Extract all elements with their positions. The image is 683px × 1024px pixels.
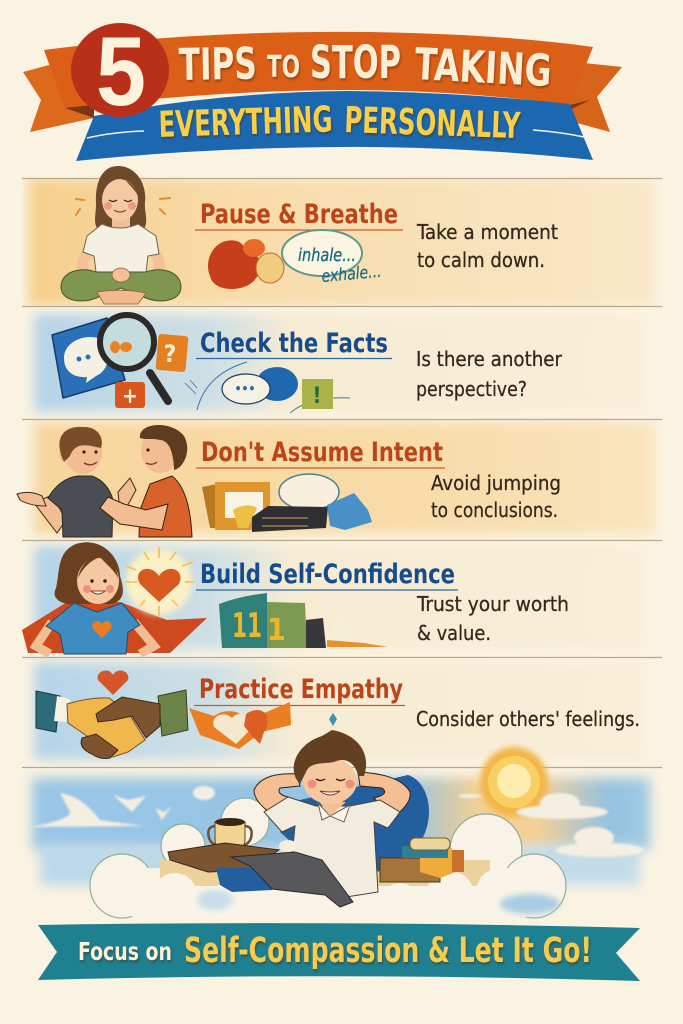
icon: blue bag <box>216 868 272 892</box>
body text: perspective? <box>416 377 527 401</box>
title text: TAKING <box>413 39 553 97</box>
panel: pause and breathe <box>22 166 662 306</box>
right ribbon tail <box>555 62 622 132</box>
panel wash <box>34 546 644 650</box>
icon: glowing heart <box>125 547 194 616</box>
panel: build self-confidence <box>22 542 662 658</box>
sun <box>480 747 548 817</box>
blue subtitle band <box>76 91 593 161</box>
panel wash <box>34 662 644 760</box>
banner text <box>78 931 592 971</box>
arms behind head <box>254 774 300 814</box>
head <box>303 758 357 804</box>
heading: Practice Empathy <box>199 674 403 705</box>
icon: two people talking <box>17 425 192 537</box>
legs <box>61 270 181 301</box>
icon: speech bubbles: ! <box>312 384 322 409</box>
left cuff <box>36 691 60 732</box>
icon: breath clouds: inhale... <box>298 245 356 266</box>
icon: folders and boxes <box>202 474 372 532</box>
ribbon folds <box>65 100 94 118</box>
feet <box>97 290 146 304</box>
body text <box>416 592 569 645</box>
body text: to calm down. <box>417 248 545 272</box>
plus tile: + <box>122 384 138 408</box>
number badge: 5 <box>96 16 146 126</box>
body text: & value. <box>417 621 491 645</box>
body text: to conclusions. <box>431 498 558 522</box>
body text: Take a moment <box>416 220 558 244</box>
icon: book on table <box>168 843 279 872</box>
icon: speech bubbles <box>185 362 350 413</box>
icon: handshake <box>36 671 188 758</box>
hair <box>55 542 123 604</box>
panel wash <box>28 178 654 306</box>
icon: small diamond <box>329 713 337 726</box>
bottom banner <box>38 923 640 981</box>
subtitle text: PERSONALLY <box>344 100 521 147</box>
collar <box>318 803 350 822</box>
body text: Is there another <box>416 347 563 371</box>
right cuff <box>158 690 188 736</box>
neck <box>318 800 346 816</box>
sky wash <box>32 778 650 850</box>
arms <box>82 252 160 277</box>
icon: blocks and hill: 1 <box>267 613 286 648</box>
person two <box>100 425 192 537</box>
banner text: Focus on <box>78 937 172 966</box>
t-shirt <box>83 224 159 272</box>
panel wash <box>34 422 654 534</box>
icon: meditating person <box>61 166 181 304</box>
shirt <box>264 797 400 898</box>
heading: Build Self-Confidence <box>200 559 455 590</box>
body text <box>416 220 558 272</box>
panel wash <box>34 314 644 412</box>
hair back <box>95 166 146 232</box>
title text: STOP <box>310 36 401 89</box>
heading: Pause & Breathe <box>200 199 398 230</box>
neck <box>112 214 130 228</box>
sky clouds <box>30 786 644 857</box>
icon: hearts and bird <box>189 702 291 749</box>
heading: Check the Facts <box>200 328 388 359</box>
face <box>77 558 119 604</box>
chat bubble <box>64 337 108 383</box>
icon: magnifier over chat <box>52 315 189 408</box>
icon: relaxing man <box>231 730 410 907</box>
cloud seat <box>90 798 566 923</box>
hands <box>112 268 130 282</box>
subtitle text <box>158 100 521 147</box>
yellow hand <box>67 698 145 757</box>
subtitle text: EVERYTHING <box>158 100 333 146</box>
title banner <box>23 16 622 161</box>
icon: breath clouds <box>208 230 382 289</box>
hand <box>279 840 297 852</box>
icon: blocks and hill: 11 <box>232 606 262 646</box>
icon: boxes <box>380 838 464 882</box>
body text <box>416 347 563 401</box>
person one <box>17 427 136 537</box>
trousers <box>231 852 353 907</box>
heading: Don't Assume Intent <box>201 437 443 468</box>
sparks <box>76 198 170 215</box>
title text: TIPS <box>178 39 257 91</box>
icon: coffee cup <box>208 818 252 853</box>
cape <box>22 602 207 653</box>
panel: practice empathy <box>22 662 662 768</box>
icon: superhero woman <box>22 542 207 654</box>
blue shirt <box>46 603 140 654</box>
panel: relaxing scene <box>30 730 650 923</box>
lens <box>100 315 154 369</box>
orange title band <box>44 32 593 108</box>
title text <box>178 36 553 97</box>
number badge <box>71 16 169 126</box>
left ribbon tail <box>23 62 94 132</box>
blue chair <box>280 775 429 872</box>
banner text: Self-Compassion & Let It Go! <box>184 931 592 971</box>
question tile: ? <box>164 340 176 368</box>
handle <box>150 373 168 401</box>
icon: breath clouds: exhale... <box>321 262 382 287</box>
body text: Consider others' feelings. <box>416 707 640 731</box>
icon: blocks and hill <box>219 593 388 648</box>
icon: speech bubbles: ••• <box>235 382 255 396</box>
hair <box>294 730 366 784</box>
body text: Trust your worth <box>416 592 569 616</box>
body text: Avoid jumping <box>431 471 561 495</box>
face <box>102 179 138 221</box>
panel: don't assume intent <box>17 422 662 540</box>
brown hand <box>96 697 160 738</box>
title text: TO <box>267 50 300 85</box>
swooshes <box>87 131 144 138</box>
small heart <box>98 671 128 695</box>
arms <box>36 622 154 654</box>
panel: check the facts <box>22 314 662 420</box>
body text <box>431 471 561 522</box>
